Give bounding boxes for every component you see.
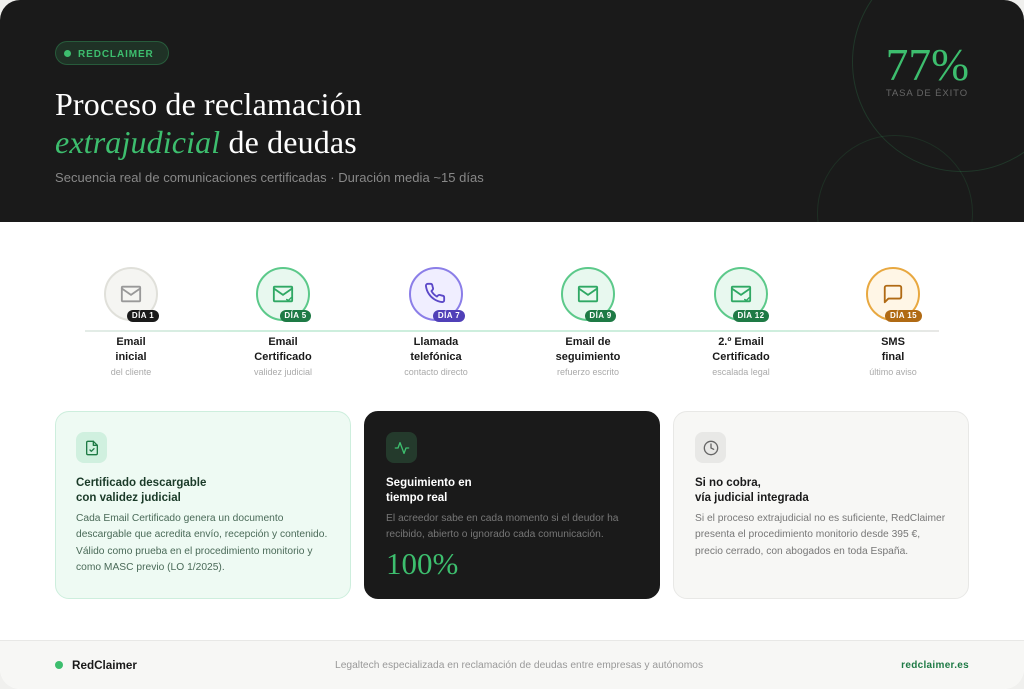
panel heading: con validez judicial [76,492,181,504]
step: día 7 [404,267,468,377]
pill dot [64,50,71,56]
step label: telefónica [410,351,462,363]
panel: certificado [55,411,351,599]
step label [712,336,770,363]
step note: refuerzo escrito [557,367,619,377]
icon: envelope [104,266,158,321]
panel text: Válido como prueba en el procedimiento monitorio y [76,546,312,557]
day badge [885,310,922,322]
step: día 9 [556,267,620,377]
day badge: DÍA 1 [132,311,154,320]
day badge [585,310,616,322]
panel heading: tiempo real [386,492,447,504]
header panel [0,0,1024,222]
day badge: DÍA 9 [589,311,612,320]
step label: Email de [565,336,611,348]
step: día 5 [254,267,312,377]
step note: contacto directo [404,367,468,377]
step note: validez judicial [254,367,312,377]
stat: 77% [886,39,969,99]
icon: document check [76,432,107,463]
title: extrajudicial de deudas [55,124,357,160]
step label: SMS [881,336,905,348]
panel text: como MASC previo (LO 1/2025). [76,562,225,573]
step label: Email [116,336,146,348]
panel heading: Si no cobra, [695,477,761,489]
step label [254,336,312,363]
panel: vía judicial [673,411,969,599]
step label: 2.º Email [718,336,764,348]
footer brand: RedClaimer [72,659,137,672]
day badge: DÍA 12 [737,311,764,320]
footer [0,640,1024,689]
step note: último aviso [869,367,917,377]
day badge [733,310,769,322]
icon: phone [408,266,463,321]
panel text [386,513,618,540]
step: día 15 [866,267,922,377]
step label: final [882,351,904,363]
icon: envelope [560,266,615,321]
panel text [695,513,945,557]
panel text: El acreedor sabe en cada momento si el deudor ha [386,513,618,524]
step label: inicial [115,351,147,363]
step note: del cliente [111,367,151,377]
day badge: DÍA 7 [438,311,460,320]
panel text [76,513,327,573]
footer link: redclaimer.es [901,660,969,671]
panel heading: Certificado descargable [76,477,206,489]
title: Proceso de reclamación [55,86,362,122]
footer tagline: Legaltech especializada en reclamación de deudas entre empresas y autónomos [335,660,703,671]
day badge: DÍA 5 [284,311,307,320]
step label: seguimiento [556,351,620,363]
icon: clock [695,432,726,463]
decorative ring large [852,0,1024,172]
panel heading [695,477,809,504]
stat: 100%: 100% [386,546,458,581]
stat label: TASA DE ÉXITO [886,88,968,99]
panel heading: Seguimiento en [386,477,472,489]
panel heading: vía judicial integrada [695,492,809,504]
step label: Llamada [414,336,458,348]
panel: seguimiento [364,411,660,599]
panel text: descargable que acredita envío, recepción y contenido. [76,529,327,540]
subtitle: Secuencia real de comunicaciones certificadas · Duración media ~15 días [55,170,484,185]
day badge: DÍA 15 [890,311,917,320]
panel text: precio cerrado, con abogados en toda España. [695,546,908,557]
day badge [433,310,465,322]
step label [881,336,905,363]
step: día 1 [104,267,159,377]
day badge [127,310,159,322]
panel heading [76,477,206,504]
step label: Certificado [254,351,312,363]
footer dot [55,661,63,669]
stat value: 77% [886,39,969,90]
pill text: REDCLAIMER [78,48,154,60]
decorative ring small [817,135,973,291]
timeline [85,330,939,332]
step note: escalada legal [712,367,770,377]
icon: message bubble [866,266,920,321]
panel text: recibido, abierto o ignorado cada comunicación. [386,529,604,540]
icon: certified envelope [714,266,768,321]
panel heading [386,477,472,504]
step: día 12 [712,267,770,377]
step label [556,336,620,363]
panel text: Si el proceso extrajudicial no es suficiente, RedClaimer [695,513,945,524]
panel text: presenta el procedimiento monitorio desde 395 €, [695,529,920,540]
day badge [280,310,311,322]
step label: Email [268,336,298,348]
brand pill [55,41,169,65]
step label: Certificado [712,351,770,363]
panel text: Cada Email Certificado genera un documento [76,513,283,524]
step label [410,336,462,363]
timeline line [85,330,939,332]
icon: activity [386,432,417,463]
step label [115,336,147,363]
title [55,86,362,160]
icon: certified envelope [256,266,310,321]
